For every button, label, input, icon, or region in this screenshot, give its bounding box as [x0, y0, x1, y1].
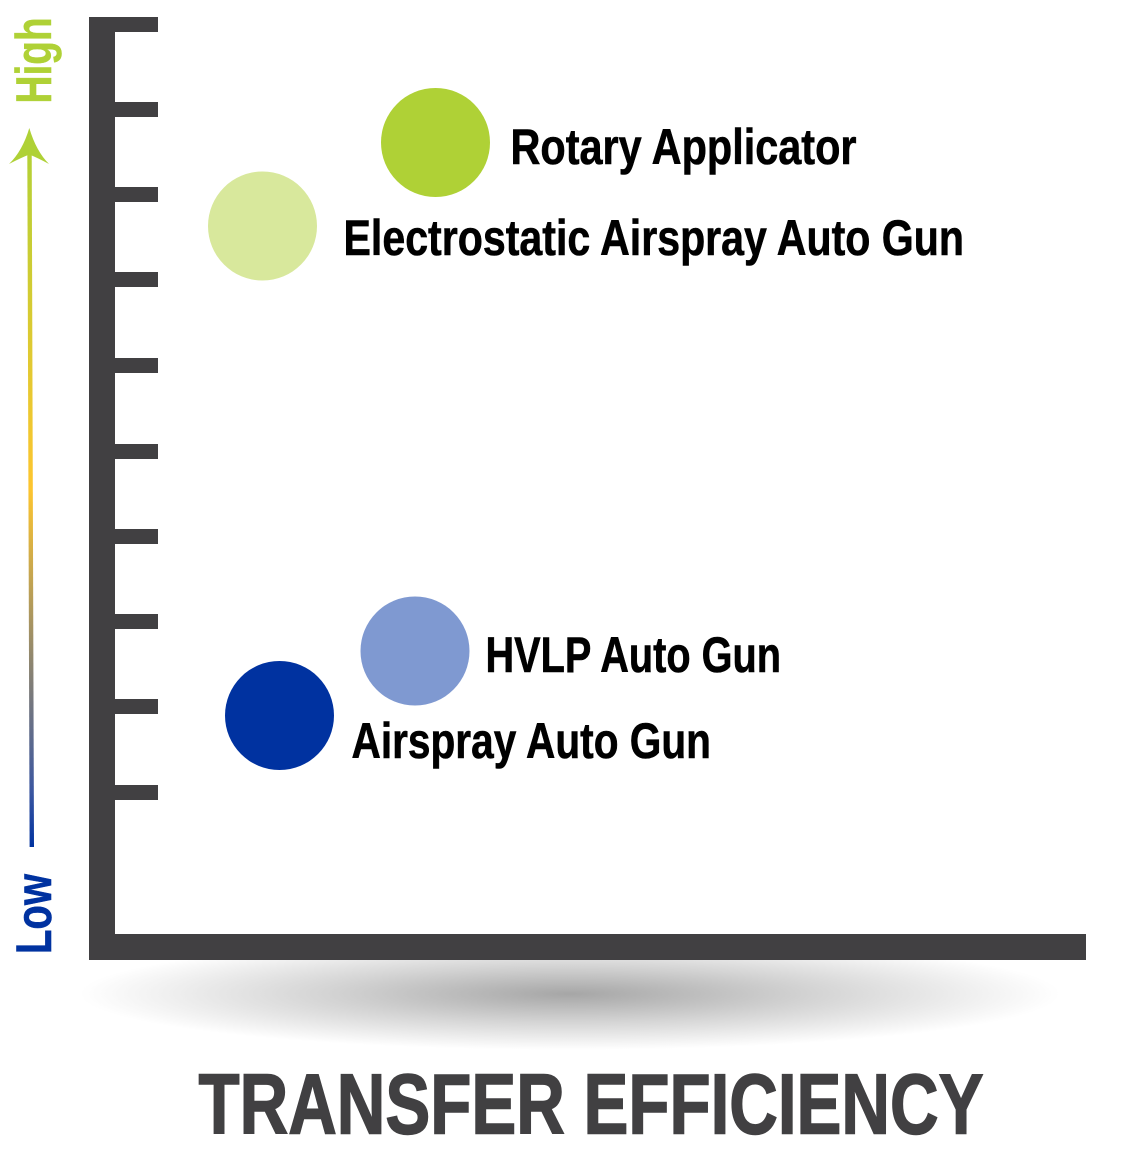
point: Rotary Applicator — [381, 88, 856, 197]
point: HVLP Auto Gun — [360, 596, 781, 706]
point: Airspray Auto Gun — [225, 661, 711, 770]
point: HVLP Auto Gun: HVLP Auto Gun — [486, 627, 781, 683]
axis shadow — [80, 938, 1060, 1050]
point: Airspray Auto Gun: Airspray Auto Gun — [352, 713, 711, 769]
y-axis arrow: low to high — [9, 128, 49, 847]
label: Low: Low — [6, 874, 62, 954]
point: Rotary Applicator: Rotary Applicator — [510, 119, 856, 175]
point: Electrostatic Airspray Auto Gun: Electrostatic Airspray Auto Gun — [344, 210, 964, 266]
point: Electrostatic Airspray Auto Gun — [208, 172, 964, 280]
axes with tick marks — [89, 17, 1086, 960]
